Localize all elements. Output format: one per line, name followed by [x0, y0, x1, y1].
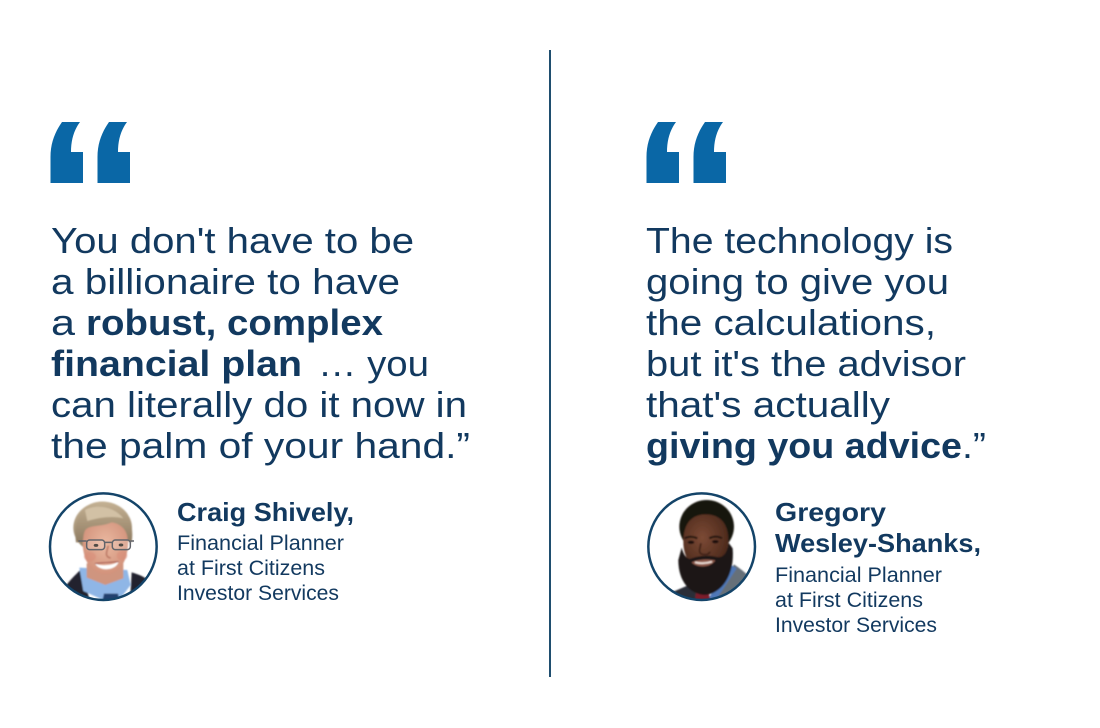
- quote text right: .”: [962, 425, 986, 466]
- attribution right: Investor Services: [775, 613, 937, 637]
- quote text left: can literally do it now in: [51, 384, 467, 425]
- portrait: Craig Shively: [47, 490, 160, 605]
- infographic: two quotes: [48, 50, 984, 677]
- quote text left: financial plan: [51, 343, 302, 384]
- attribution right: Gregory: [775, 497, 887, 527]
- attribution left: Investor Services: [177, 581, 339, 605]
- attribution right: at First Citizens: [775, 588, 923, 612]
- attribution right: Financial Planner: [775, 563, 942, 587]
- quote text left: robust, complex: [86, 302, 383, 343]
- quote text right: that's actually: [646, 384, 890, 425]
- quote text right: going to give you: [646, 261, 949, 302]
- quote text right: but it's the advisor: [646, 343, 966, 384]
- attribution left: Financial Planner: [177, 531, 344, 555]
- attribution left: Craig Shively,: [177, 497, 354, 527]
- quote text right: giving you advice: [646, 425, 962, 466]
- panel: Craig Shively quote: [47, 122, 470, 605]
- quote text right: [646, 220, 986, 466]
- attribution left: [177, 497, 354, 605]
- attribution right: Wesley-Shanks,: [775, 528, 981, 558]
- panel: Gregory Wesley-Shanks quote: [646, 122, 986, 637]
- center divider: [549, 50, 551, 677]
- icon: quotation mark right: [646, 122, 726, 183]
- quote text left: … you: [318, 343, 429, 384]
- quote text left: You don't have to be: [51, 220, 414, 261]
- quote text right: The technology is: [646, 220, 953, 261]
- quote text left: a: [51, 302, 76, 343]
- quote text left: the palm of your hand.”: [51, 425, 470, 466]
- attribution right: [775, 497, 981, 637]
- quote text left: a billionaire to have: [51, 261, 400, 302]
- attribution left: at First Citizens: [177, 556, 325, 580]
- quote text left: [51, 220, 470, 466]
- quote text right: the calculations,: [646, 302, 936, 343]
- portrait: Gregory Wesley-Shanks: [647, 492, 757, 605]
- icon: quotation mark left: [50, 122, 130, 183]
